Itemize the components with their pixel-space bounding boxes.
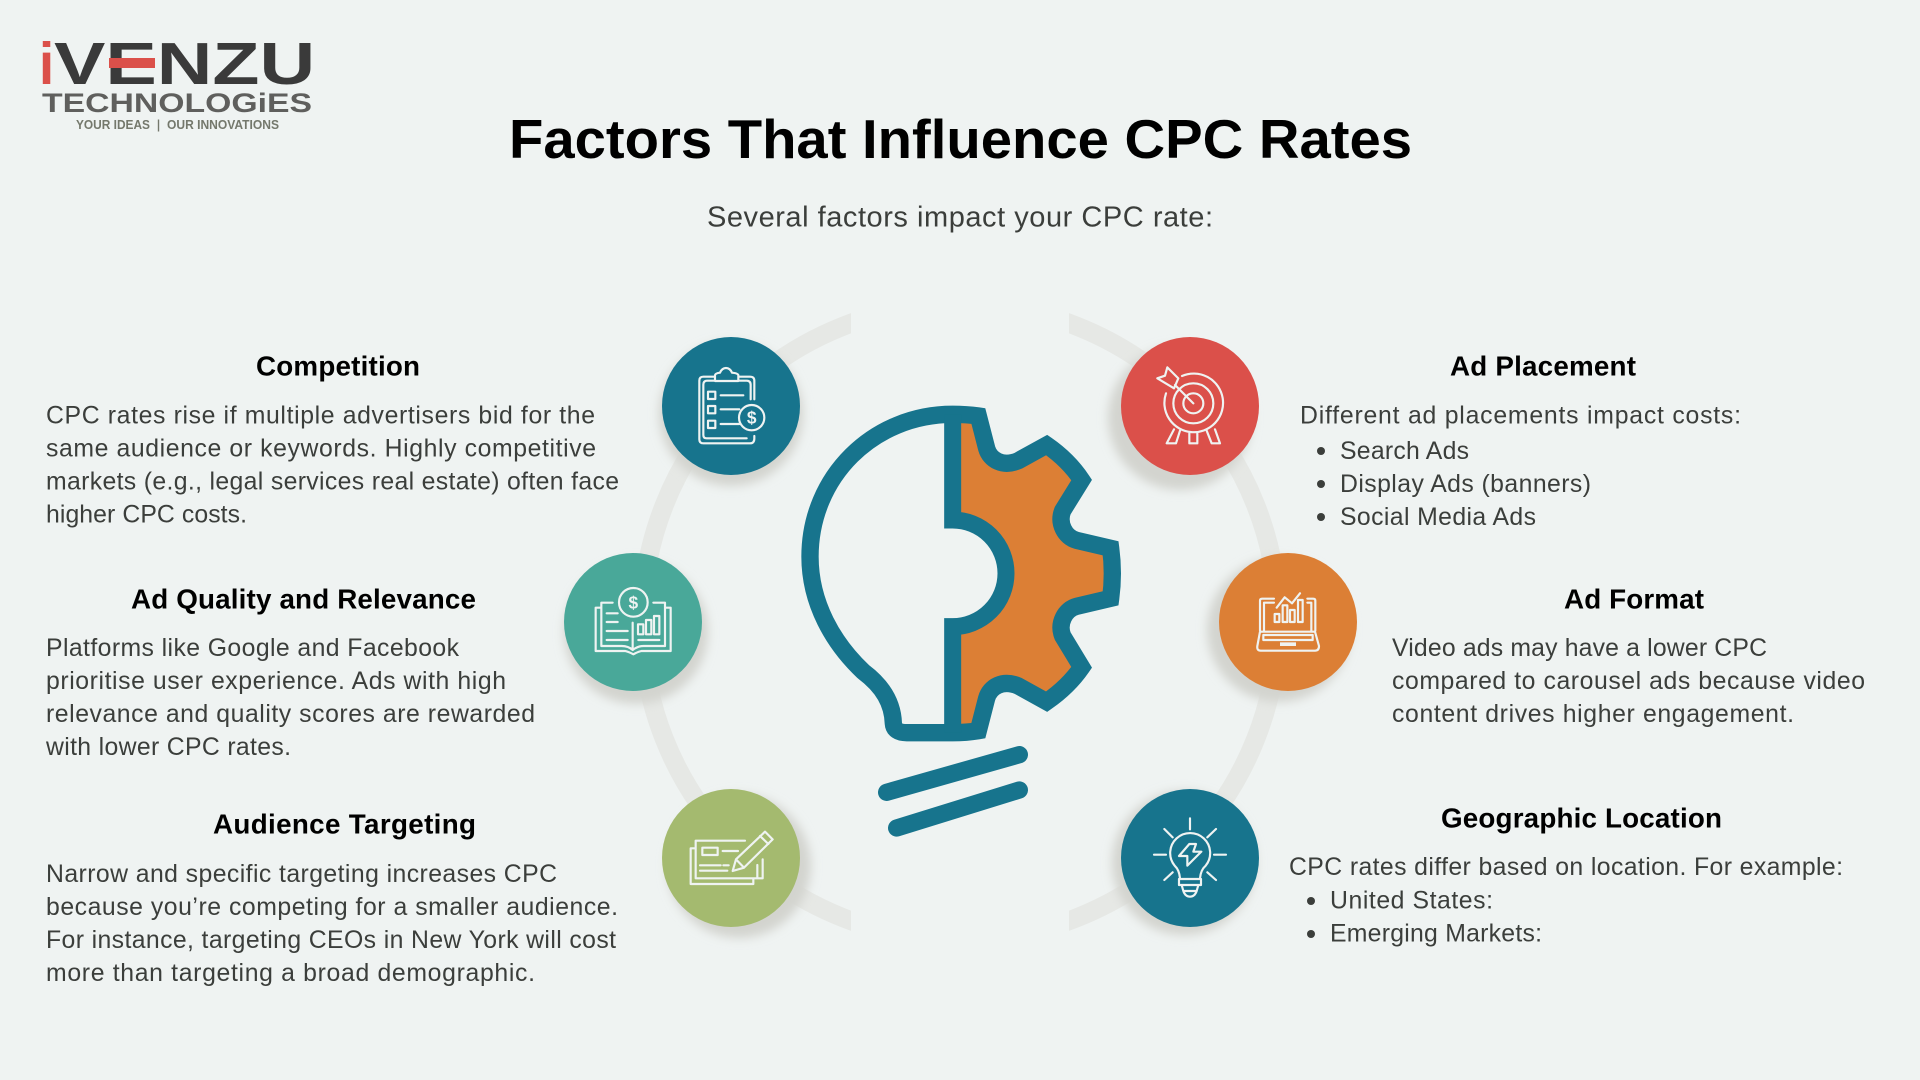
ring behind circles bbox=[642, 304, 1278, 940]
icon: book with dollar and chart: $ bbox=[629, 592, 639, 612]
text: ad placement bbox=[1300, 402, 1741, 531]
logo tagline: OUR INNOVATIONS bbox=[167, 118, 279, 132]
logo wordmark: VENZU bbox=[54, 30, 315, 97]
text: audience targeting: because you’re competing for a smaller audience. bbox=[46, 894, 618, 921]
icon: target with arrow bbox=[1108, 337, 1259, 490]
icon: cheque and pencil bbox=[662, 789, 811, 938]
text: competition bbox=[46, 402, 619, 528]
text: ad quality: relevance and quality scores are rewarded bbox=[46, 701, 535, 728]
icon: clipboard with dollar bbox=[659, 337, 803, 486]
icon: laptop with chart bbox=[1207, 553, 1357, 702]
text: ad quality: Platforms like Google and Facebook bbox=[46, 635, 460, 662]
logo tagline: YOUR IDEAS bbox=[76, 118, 150, 132]
bulb base lines bbox=[887, 755, 1019, 828]
logo: iVENZU Technologies bbox=[39, 30, 315, 132]
text: ad format: Video ads may have a lower CPC bbox=[1392, 635, 1767, 662]
text: ad quality: prioritise user experience. Ads with high bbox=[46, 668, 506, 695]
icon: lightbulb with bolt bbox=[1112, 789, 1259, 935]
panel: competition bbox=[46, 350, 619, 528]
text: audience targeting bbox=[46, 861, 618, 987]
text: ad placement: Display Ads (banners) bbox=[1340, 471, 1591, 498]
text: geographic location bbox=[1289, 854, 1843, 948]
text: audience targeting: Narrow and specific targeting increases CPC bbox=[46, 861, 557, 888]
panel: ad quality and relevance bbox=[45, 584, 535, 761]
text: ad format: compared to carousel ads because video bbox=[1392, 668, 1865, 695]
text: competition: markets (e.g., legal services real estate) often face bbox=[46, 468, 619, 496]
logo wordmark: i bbox=[39, 31, 54, 97]
text: ad placement: Social Media Ads bbox=[1340, 504, 1536, 531]
heading: audience targeting: Audience Targeting bbox=[213, 808, 476, 840]
icon: book with dollar and chart bbox=[564, 553, 708, 704]
text: ad format bbox=[1392, 635, 1865, 728]
panel: ad placement bbox=[1300, 350, 1741, 531]
text: audience targeting: more than targeting a broad demographic. bbox=[46, 960, 535, 987]
text: ad placement: Search Ads bbox=[1340, 438, 1469, 465]
panel: audience targeting bbox=[46, 808, 618, 987]
heading: geographic location: Geographic Location bbox=[1441, 802, 1722, 834]
text: geographic location: Emerging Markets: bbox=[1330, 920, 1542, 948]
text: competition: higher CPC costs. bbox=[46, 502, 247, 528]
heading: ad quality: Ad Quality and Relevance bbox=[131, 584, 476, 614]
text: ad quality: with lower CPC rates. bbox=[45, 734, 291, 761]
text: ad quality bbox=[45, 635, 535, 761]
central icon: lightbulb with gear bbox=[810, 414, 1112, 828]
bulb and gear outline bbox=[810, 414, 1112, 733]
text: competition: same audience or keywords. Highly competitive bbox=[46, 436, 596, 462]
text: ad format: content drives higher engagement. bbox=[1392, 701, 1794, 728]
text: audience targeting: For instance, targeting CEOs in New York will cost bbox=[46, 927, 616, 954]
icon: clipboard with dollar: $ bbox=[747, 408, 757, 428]
heading: competition: Competition bbox=[256, 350, 420, 382]
subtitle: Several factors impact your CPC rate: bbox=[707, 202, 1213, 234]
bulb divider and hub bbox=[953, 414, 1006, 733]
heading: ad placement: Ad Placement bbox=[1450, 350, 1636, 382]
text: ad placement: Different ad placements impact costs: bbox=[1300, 402, 1741, 430]
logo tagline: | bbox=[157, 118, 160, 132]
text: geographic location: CPC rates differ based on location. For example: bbox=[1289, 854, 1843, 881]
title: Factors That Influence CPC Rates bbox=[509, 108, 1412, 170]
panel: geographic location bbox=[1289, 802, 1843, 948]
text: geographic location: United States: bbox=[1330, 888, 1493, 914]
gear fill bbox=[953, 414, 1112, 733]
logo tagline bbox=[76, 118, 279, 132]
text: competition: CPC rates rise if multiple advertisers bid for the bbox=[46, 402, 595, 430]
panel: ad format bbox=[1392, 584, 1865, 728]
heading: ad format: Ad Format bbox=[1564, 584, 1704, 614]
logo TECHNOLOGIES: TECHNOLOGiES bbox=[42, 88, 312, 118]
